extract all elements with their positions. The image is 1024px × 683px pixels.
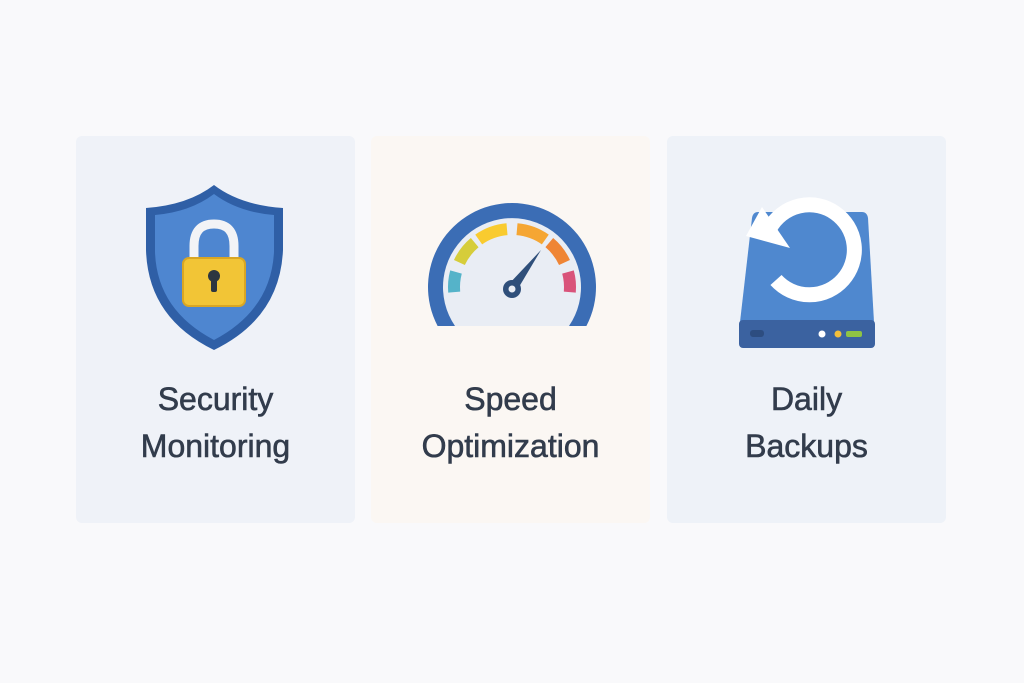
heading: Daily Backups: Backups: [745, 428, 868, 464]
heading: Speed Optimization: Speed: [464, 381, 557, 417]
heading: Security Monitoring: [141, 381, 290, 464]
heading: Daily Backups: [745, 381, 868, 464]
icon: drive with refresh arrow: [739, 198, 875, 348]
heading: Security Monitoring: Monitoring: [141, 428, 290, 464]
panel: security: [76, 136, 355, 523]
panel: speed: [371, 136, 650, 523]
heading: Speed Optimization: Optimization: [422, 428, 599, 464]
icon: shield with lock: [146, 185, 283, 350]
panel: backups: [667, 136, 946, 523]
heading: Speed Optimization: [422, 381, 599, 464]
heading: Security Monitoring: Security: [158, 381, 273, 417]
icon: speedometer: [428, 203, 596, 326]
heading: Daily Backups: Daily: [771, 381, 842, 417]
